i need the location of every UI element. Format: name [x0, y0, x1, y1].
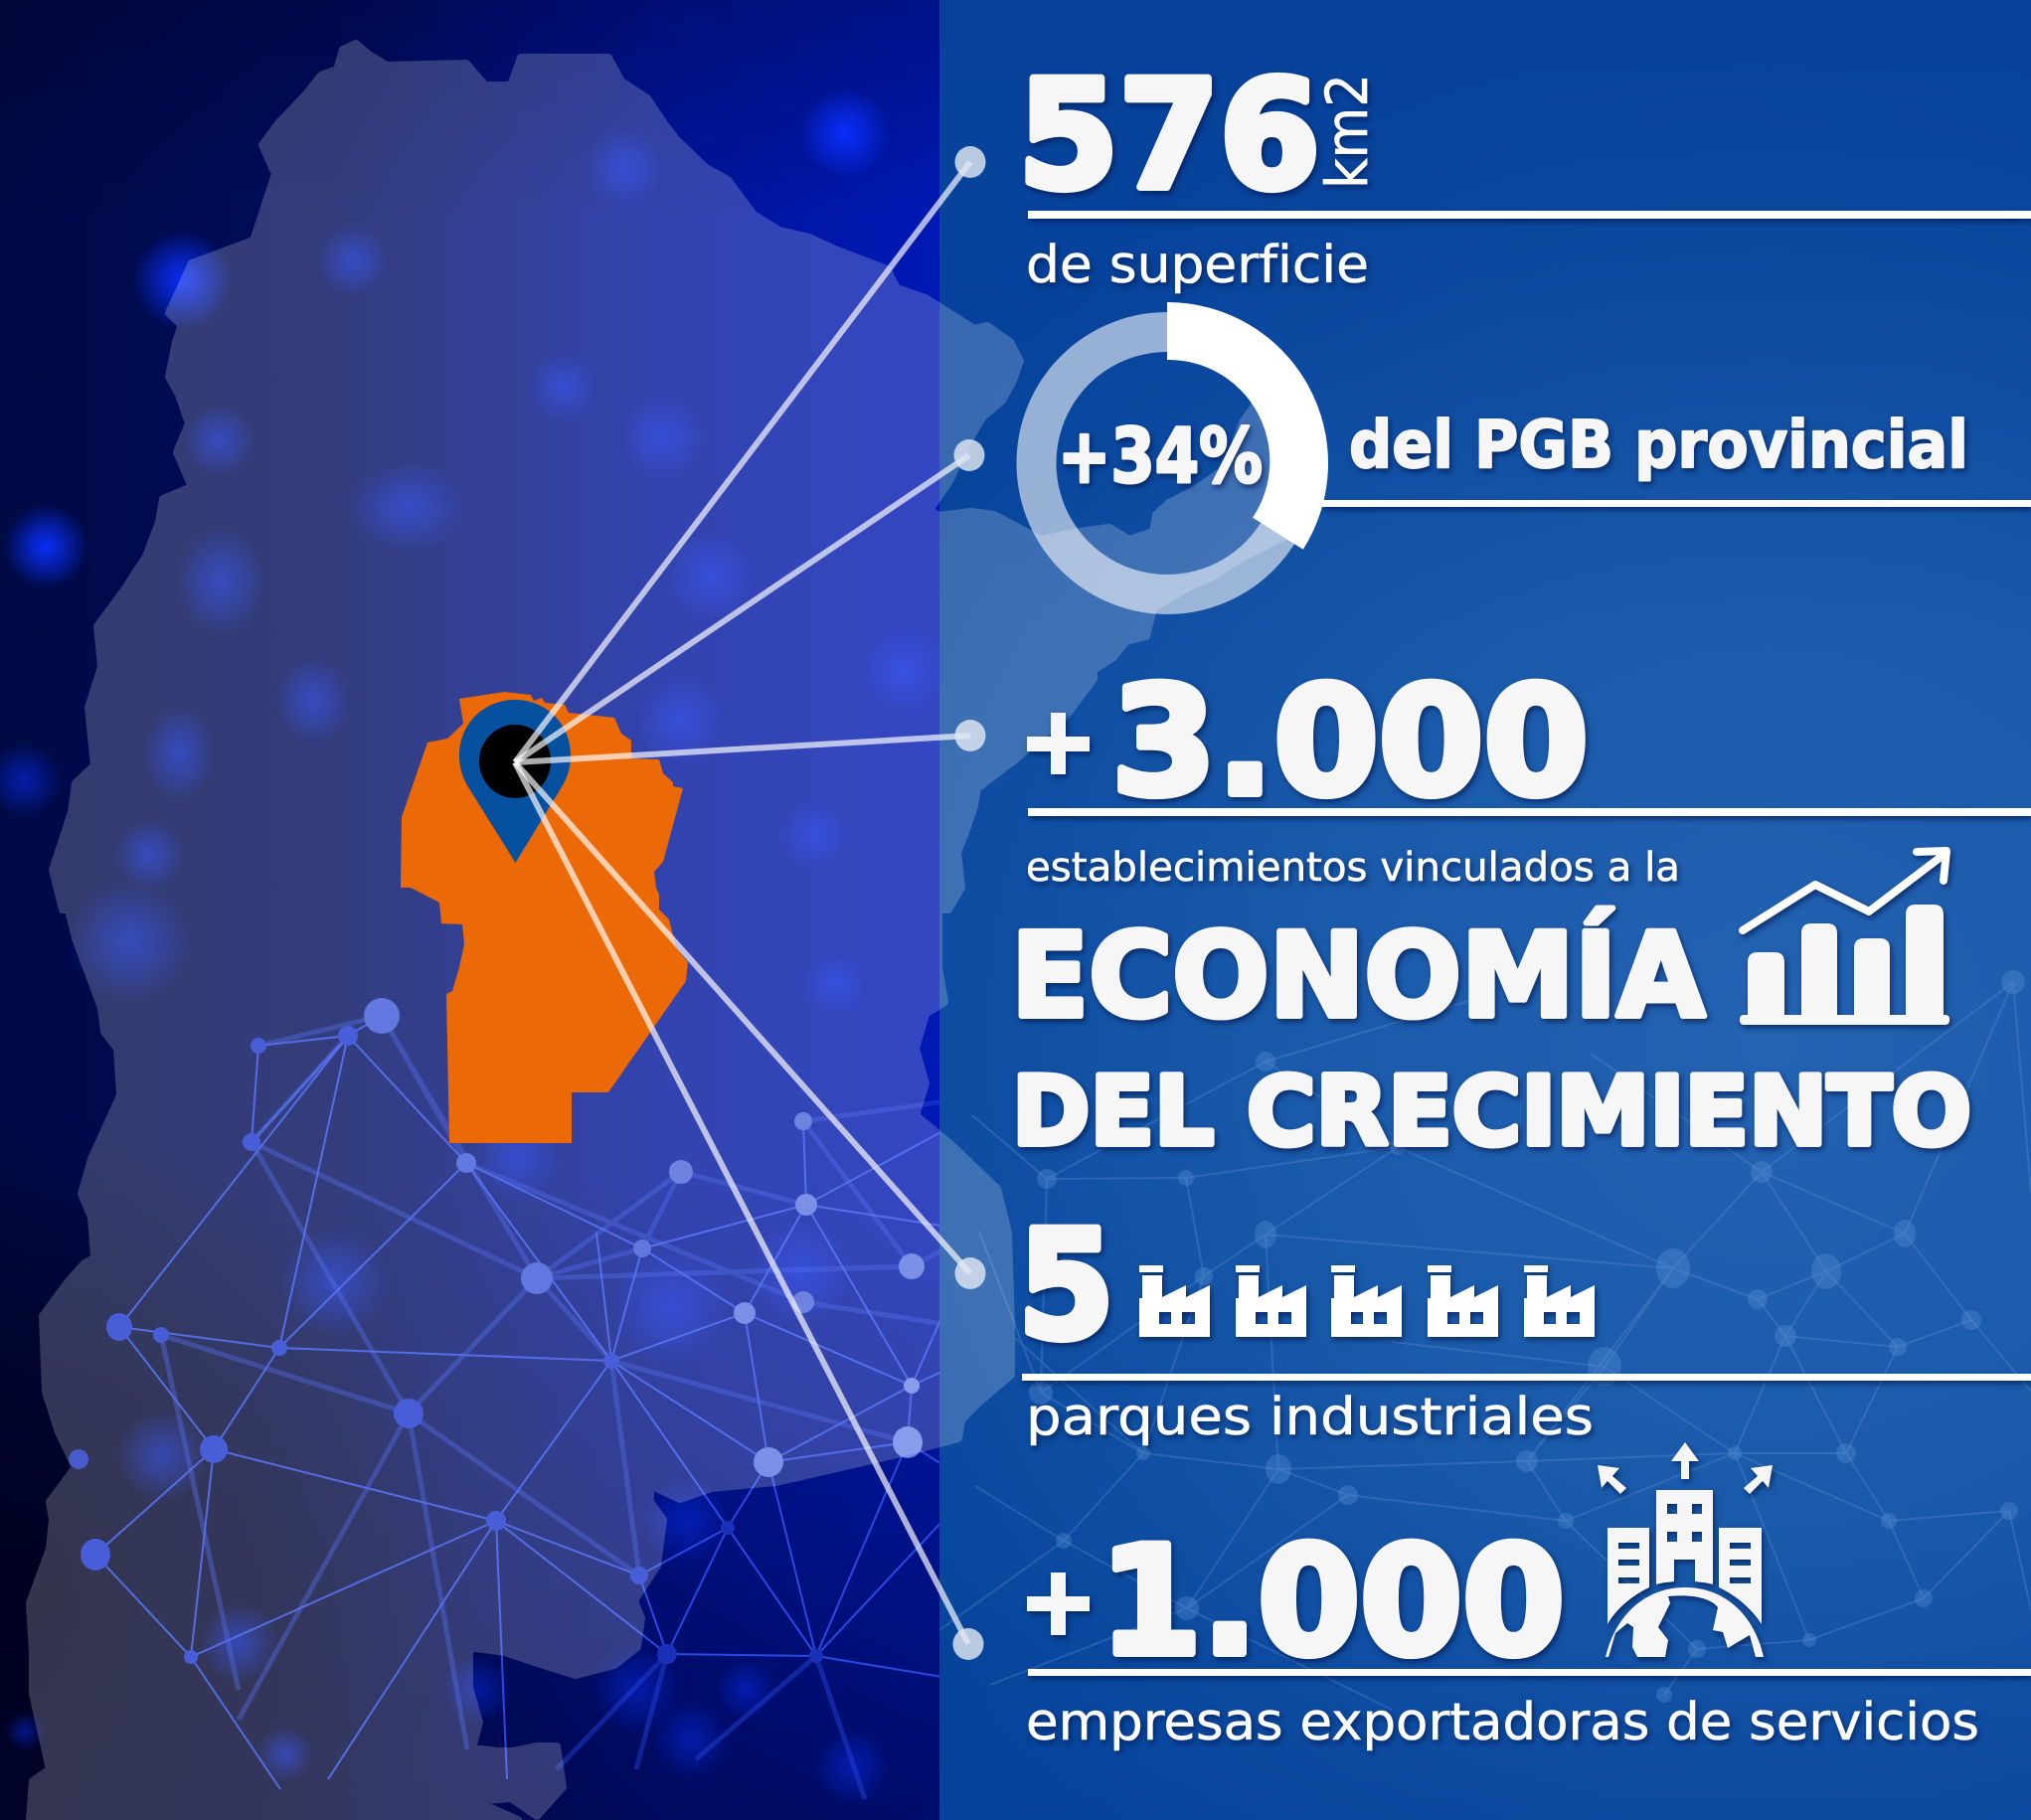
icon: export buildings and globe: [1598, 1442, 1773, 1657]
divider 2: [1322, 500, 2031, 507]
divider 1: [1028, 211, 2031, 219]
panel network nodes: [1029, 970, 2025, 1703]
background: left dark blue field: [0, 0, 939, 1820]
icon: growth bar chart: [1740, 851, 1949, 1025]
stat: +1.000: 1.000: [1100, 1516, 1565, 1689]
divider 5: [1028, 1669, 2031, 1676]
icons: five factories: [1139, 1265, 1595, 1337]
divider 3: [1028, 808, 2031, 816]
heading: ECONOMÍA: ECONOMÍA: [1011, 907, 1705, 1044]
map: Córdoba province in orange: [401, 692, 688, 1143]
connector lines from pin to stats: [515, 162, 970, 1644]
text: de superficie: de superficie: [1026, 236, 1369, 295]
donut chart: +34%: [1017, 302, 1328, 614]
divider 4: [1022, 1374, 2031, 1381]
network: nodes: [69, 998, 993, 1664]
location pin: [459, 700, 571, 863]
text: empresas exportadoras de servicios: empresas exportadoras de servicios: [1026, 1693, 1979, 1752]
stat: +3.000: 3.000: [1111, 656, 1589, 829]
text: establecimientos vinculados a la: establecimientos vinculados a la: [1026, 845, 1680, 891]
text: parques industriales: parques industriales: [1026, 1388, 1594, 1447]
text: del PGB provincial: del PGB provincial: [1349, 407, 1968, 483]
map of Argentina silhouette: [30, 44, 1292, 1820]
donut chart: +34%: +34%: [1058, 412, 1263, 500]
stat: 5: 5: [1018, 1200, 1114, 1373]
panel network: [939, 982, 2031, 1710]
network: soft wide links: [161, 1016, 1004, 1799]
panel: right blue column: [939, 0, 2031, 1820]
network: thin links: [95, 1016, 1054, 1789]
glowing light spots: [0, 88, 944, 1805]
heading: DEL CRECIMIENTO: DEL CRECIMIENTO: [1012, 1058, 1971, 1167]
stat: 576 km2: 576: [1018, 50, 1320, 223]
stat: 576 km2: km2: [1313, 74, 1381, 189]
connector end dots: [952, 146, 986, 1660]
